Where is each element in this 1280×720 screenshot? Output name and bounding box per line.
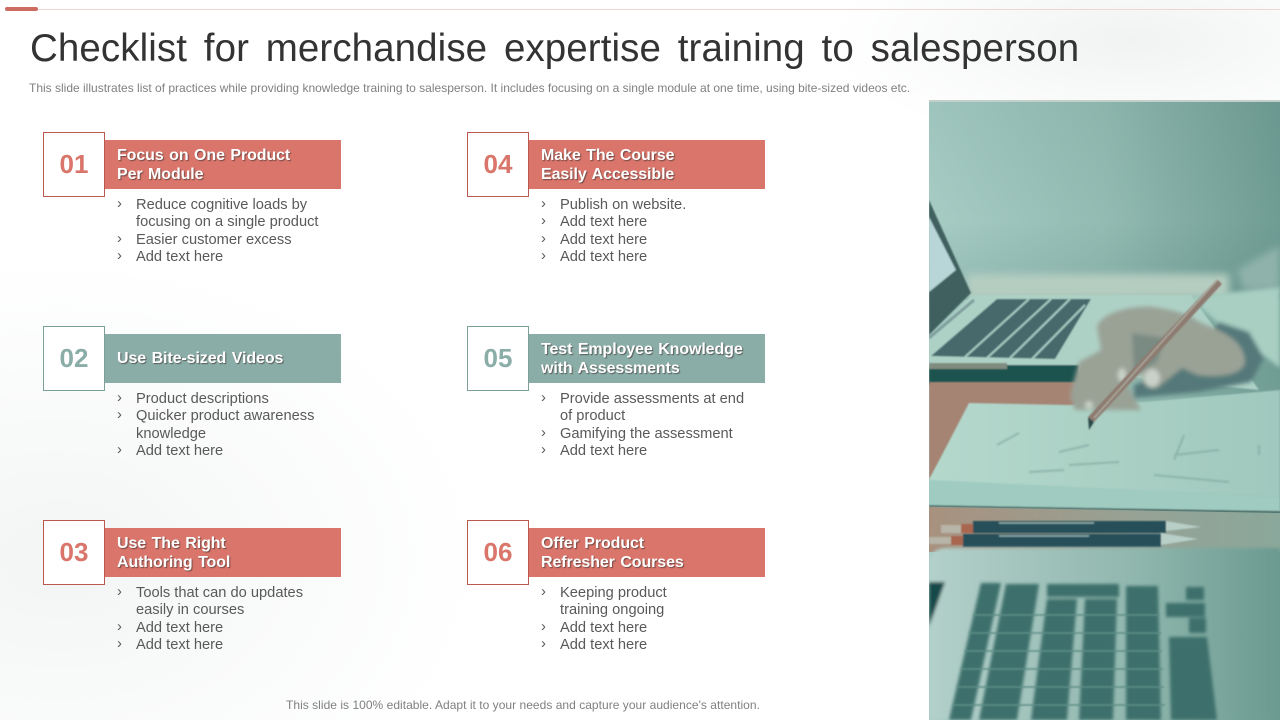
panel: 01 focus on one product: Per Module <box>117 166 203 183</box>
panel: 01 focus on one product: Reduce cognitive loads by <box>136 196 307 212</box>
panel: 02 bite-sized videos: Use Bite-sized Videos <box>117 350 283 367</box>
panel: 03 authoring tool: Add text here <box>136 620 223 636</box>
top edge of photo <box>929 100 1280 102</box>
panel: 05 assessments: 05 <box>484 343 512 373</box>
panel: 01 focus on one product: 01 <box>60 149 88 179</box>
panel: 04 accessible course: Publish on website. <box>560 196 686 212</box>
title: Checklist for merchandise expertise training to salesperson <box>30 27 1079 70</box>
panel: 04 accessible course: Add text here <box>560 214 647 230</box>
panel: 01 focus on one product: Easier customer excess <box>136 232 292 248</box>
panel: 05 assessments <box>467 326 765 459</box>
panel: 05 assessments: with Assessments <box>541 360 680 377</box>
desk surface <box>929 507 1280 552</box>
table top <box>929 382 1079 480</box>
panel: 02 bite-sized videos <box>43 326 341 459</box>
panel: 06 refresher courses: Add text here <box>560 620 647 636</box>
keyboard keys <box>949 583 1217 720</box>
panel: 03 authoring tool: Use The Right <box>117 535 226 552</box>
panel: 05 assessments: of product <box>560 408 625 424</box>
panel: 02 bite-sized videos: Product descriptions <box>136 390 269 406</box>
panel: 02 bite-sized videos: knowledge <box>136 426 206 442</box>
panel: 06 refresher courses: Add text here <box>560 637 647 653</box>
photo: hand writing notes between laptops <box>929 100 1280 720</box>
panel: 03 authoring tool: Tools that can do updates <box>136 584 303 600</box>
panel: 03 authoring tool: 03 <box>60 537 88 567</box>
panel: 05 assessments: Test Employee Knowledge <box>541 341 743 358</box>
panel: 06 refresher courses: Refresher Courses <box>541 554 684 571</box>
panel: 04 accessible course <box>467 132 765 265</box>
panel: 04 accessible course: Add text here <box>560 232 647 248</box>
panel: 02 bite-sized videos: Quicker product awareness <box>136 408 314 424</box>
panel: 04 accessible course: Easily Accessible <box>541 166 674 183</box>
panel: 04 accessible course: 04 <box>484 149 512 179</box>
pencil <box>1088 279 1222 430</box>
panel: 02 bite-sized videos: 02 <box>60 343 88 373</box>
panel: 06 refresher courses: Keeping product <box>560 584 667 600</box>
subtitle description: This slide illustrates list of practices while providing knowledge training to salesperson. It includes focusing on a single module at one time, using bite-sized videos etc. <box>29 81 910 95</box>
panel: 01 focus on one product: Add text here <box>136 249 223 265</box>
panel: 06 refresher courses: training ongoing <box>560 602 664 618</box>
panel: 06 refresher courses <box>467 520 765 653</box>
panel: 03 authoring tool: easily in courses <box>136 602 244 618</box>
panel: 06 refresher courses: Offer Product <box>541 535 644 552</box>
panel: 03 authoring tool: Authoring Tool <box>117 554 230 571</box>
panel: 01 focus on one product: Focus on One Product <box>117 147 290 164</box>
pens <box>929 521 1201 547</box>
panel: 04 accessible course: Add text here <box>560 249 647 265</box>
panel: 01 focus on one product: focusing on a single product <box>136 214 319 230</box>
panel: 02 bite-sized videos: Add text here <box>136 443 223 459</box>
panel: 05 assessments: Add text here <box>560 443 647 459</box>
panel: 05 assessments: Provide assessments at end <box>560 390 744 406</box>
panel: 06 refresher courses: 06 <box>484 537 512 567</box>
panel: 05 assessments: Gamifying the assessment <box>560 426 733 442</box>
footer note: This slide is 100% editable. Adapt it to your needs and capture your audience's attention. <box>286 698 760 712</box>
notes paper <box>929 390 1280 512</box>
panel: 03 authoring tool: Add text here <box>136 637 223 653</box>
front laptop <box>929 548 1280 720</box>
panel: 01 focus on one product <box>43 132 341 265</box>
panel: 03 authoring tool <box>43 520 341 653</box>
back laptop <box>929 200 1259 390</box>
hand and sleeve <box>1070 287 1280 410</box>
panel: 04 accessible course: Make The Course <box>541 147 674 164</box>
